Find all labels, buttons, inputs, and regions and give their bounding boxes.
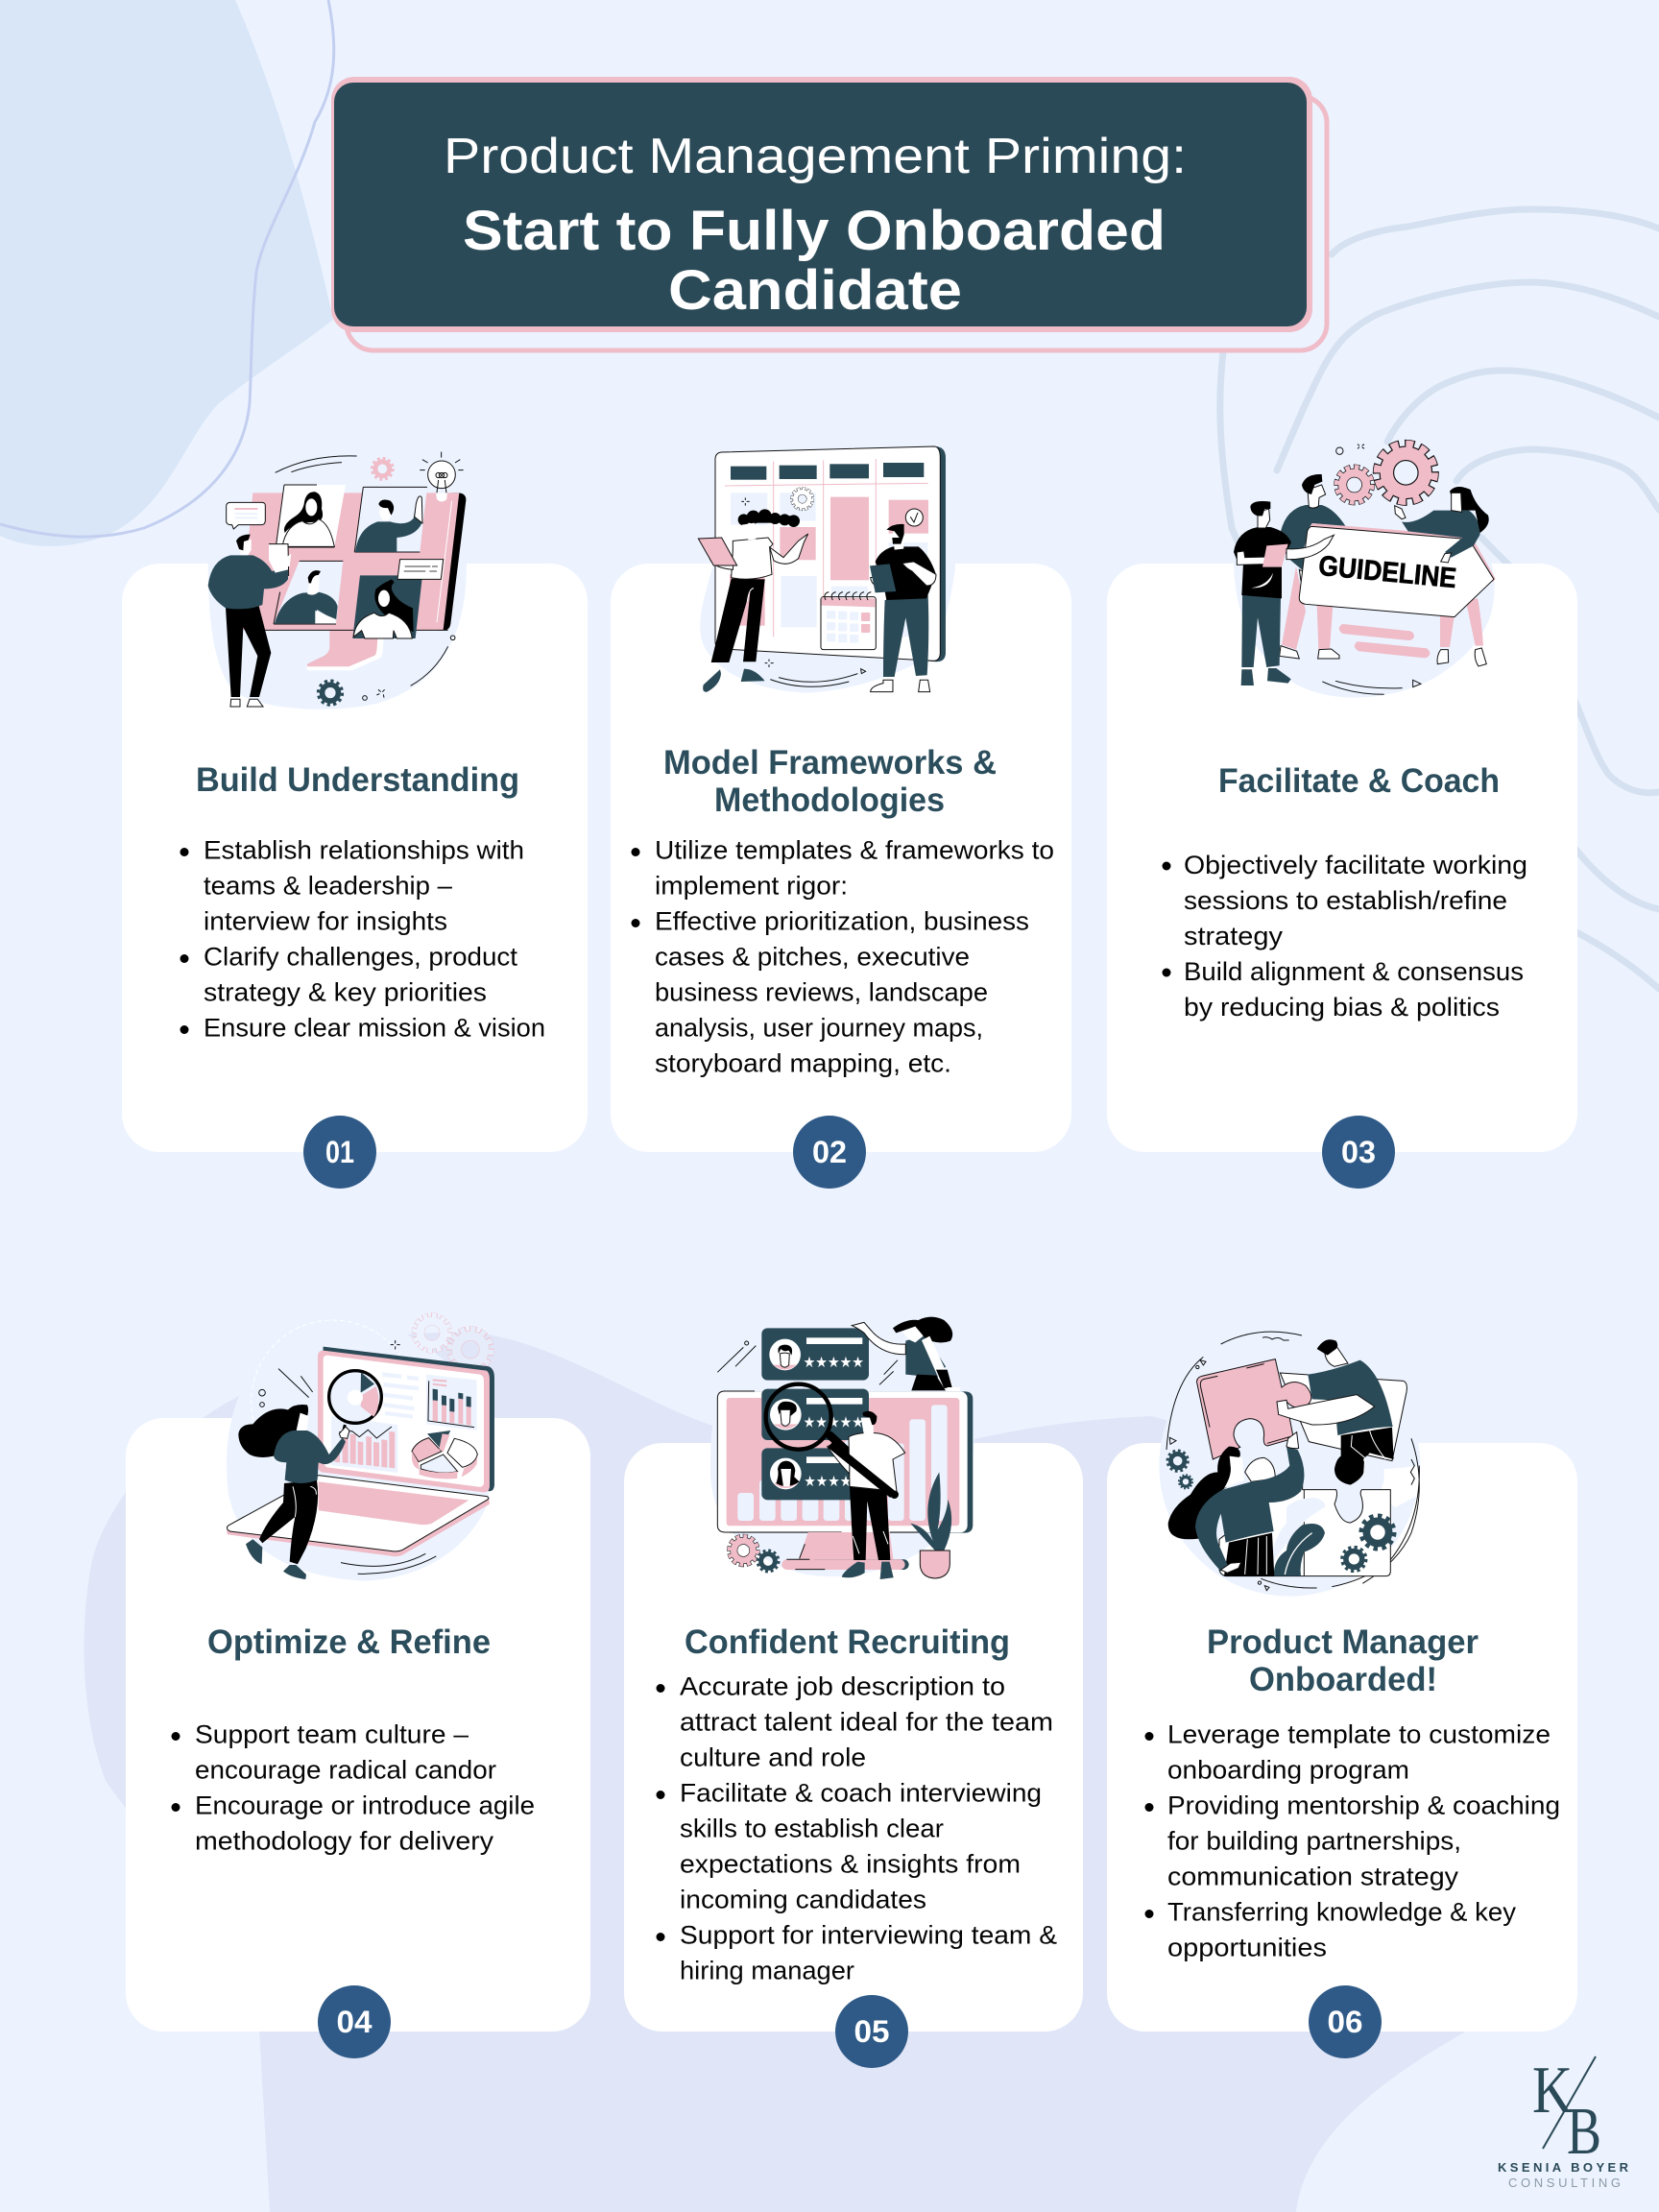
logo: Ksenia Boyer Consulting: KSENIA BOYER xyxy=(1498,2160,1629,2175)
number badge 06 xyxy=(1309,1985,1382,2058)
number badge 04 xyxy=(318,1985,391,2058)
heading: Model Frameworks & xyxy=(663,744,997,781)
bullet list: Clarify challenges, product xyxy=(204,943,517,972)
bullet list: Utilize templates & frameworks to xyxy=(655,835,1054,864)
bullet list xyxy=(632,835,1054,1077)
bullet list: Leverage template to customize xyxy=(1167,1720,1551,1749)
bullet list: storyboard mapping, etc. xyxy=(655,1048,951,1077)
number badge 01 xyxy=(303,1116,376,1189)
heading: Methodologies xyxy=(714,781,945,819)
number badge 01: 01 xyxy=(325,1135,354,1169)
heading: Onboarded! xyxy=(1249,1661,1437,1698)
bullet list: Accurate job description to xyxy=(680,1672,1005,1701)
illustration: candidate ratings xyxy=(710,1317,974,1579)
illustration: candidate ratings: ★★★★★ xyxy=(804,1354,864,1371)
logo: Ksenia Boyer Consulting: B xyxy=(1567,2095,1601,2169)
bullet list: communication strategy xyxy=(1167,1863,1459,1891)
bullet list: onboarding program xyxy=(1167,1755,1409,1784)
bullet list: Establish relationships with xyxy=(204,835,524,864)
number badge 02 xyxy=(793,1116,866,1189)
bullet list: Transferring knowledge & key xyxy=(1167,1897,1517,1926)
panel: 03 facilitate and coach xyxy=(1107,445,1577,1189)
bullet list xyxy=(171,1720,535,1855)
heading xyxy=(663,744,997,819)
background blob: bottom xyxy=(84,1333,1576,2212)
bullet list: encourage radical candor xyxy=(195,1755,496,1784)
logo: Ksenia Boyer Consulting xyxy=(1498,2054,1629,2190)
bullet list: culture and role xyxy=(680,1743,866,1772)
bullet list: strategy & key priorities xyxy=(204,977,487,1006)
number badge 02: 02 xyxy=(812,1135,847,1169)
bullet list: methodology for delivery xyxy=(195,1826,494,1855)
bullet list: skills to establish clear xyxy=(680,1815,944,1843)
bullet list: Facilitate & coach interviewing xyxy=(680,1778,1042,1807)
title line 3: Candidate xyxy=(668,259,962,322)
heading xyxy=(1207,1623,1479,1698)
bullet list: for building partnerships, xyxy=(1167,1826,1461,1855)
bullet list: expectations & insights from xyxy=(680,1849,1021,1878)
heading: Product Manager xyxy=(1207,1623,1479,1661)
heading: Build Understanding xyxy=(196,761,519,799)
bullet list: Build alignment & consensus xyxy=(1184,957,1524,986)
bullet list: Support for interviewing team & xyxy=(680,1920,1057,1949)
background blob: top left xyxy=(0,0,333,546)
background line: top left xyxy=(0,0,334,537)
number badge 04: 04 xyxy=(336,2005,373,2039)
bullet list: cases & pitches, executive xyxy=(655,943,970,972)
banner back outline xyxy=(347,96,1327,350)
bullet list: incoming candidates xyxy=(680,1886,926,1914)
bullet list xyxy=(180,835,545,1043)
banner front xyxy=(331,77,1312,332)
heading: Facilitate & Coach xyxy=(1218,762,1500,800)
illustration: candidate ratings: ★★★★★ xyxy=(804,1414,864,1431)
title line 1: Product Management Priming: xyxy=(444,129,1187,184)
bullet list: business reviews, landscape xyxy=(655,977,988,1006)
bullet list: Ensure clear mission & vision xyxy=(204,1014,545,1043)
background contour lines: right xyxy=(1220,209,1659,989)
title line 2: Start to Fully Onboarded xyxy=(463,200,1166,262)
bullet list: analysis, user journey maps, xyxy=(655,1014,983,1043)
bullet list: opportunities xyxy=(1167,1934,1327,1962)
illustration: guideline sign: GUIDELINE xyxy=(1317,550,1457,594)
bullet list: Effective prioritization, business xyxy=(655,906,1029,935)
bullet list: sessions to establish/refine xyxy=(1184,886,1507,915)
bullet list: teams & leadership – xyxy=(204,872,452,901)
heading: Optimize & Refine xyxy=(207,1623,491,1661)
illustration: candidate ratings: ★★★★ xyxy=(804,1473,852,1490)
illustration: guideline sign xyxy=(1234,445,1496,698)
panel: 05 confident recruiting xyxy=(624,1317,1083,2068)
number badge 06: 06 xyxy=(1327,2005,1363,2039)
illustration: laptop analytics xyxy=(227,1315,494,1581)
bullet list: attract talent ideal for the team xyxy=(680,1707,1053,1736)
number badge 05 xyxy=(835,1995,908,2068)
bullet list: implement rigor: xyxy=(655,872,848,901)
heading: Confident Recruiting xyxy=(685,1623,1010,1661)
bullet list: by reducing bias & politics xyxy=(1184,993,1500,1022)
bullet list: Support team culture – xyxy=(195,1720,469,1749)
number badge 03 xyxy=(1322,1116,1395,1189)
bullet list xyxy=(1162,851,1527,1022)
bullet list: Objectively facilitate working xyxy=(1184,851,1527,879)
title banner xyxy=(331,77,1327,350)
bullet list: interview for insights xyxy=(204,906,447,935)
number badge 03: 03 xyxy=(1341,1135,1376,1169)
bullet list: Providing mentorship & coaching xyxy=(1167,1791,1560,1820)
number badge 05: 05 xyxy=(854,2014,889,2049)
panel: 06 product manager onboarded xyxy=(1107,1332,1577,2058)
bullet list: Encourage or introduce agile xyxy=(195,1791,535,1820)
bullet list xyxy=(657,1672,1057,1985)
bullet list xyxy=(1144,1720,1560,1962)
logo: Ksenia Boyer Consulting: K xyxy=(1532,2054,1573,2128)
bullet list: hiring manager xyxy=(680,1957,854,1985)
illustration: video call xyxy=(208,452,467,709)
illustration: puzzle pieces xyxy=(1159,1332,1420,1597)
illustration: kanban board xyxy=(698,446,955,693)
panel: 01 build understanding xyxy=(122,452,588,1189)
panel: 04 optimize and refine xyxy=(126,1315,590,2058)
bullet list: strategy xyxy=(1184,922,1284,950)
logo: Ksenia Boyer Consulting: CONSULTING xyxy=(1508,2176,1621,2190)
panel: 02 model frameworks xyxy=(611,446,1071,1189)
